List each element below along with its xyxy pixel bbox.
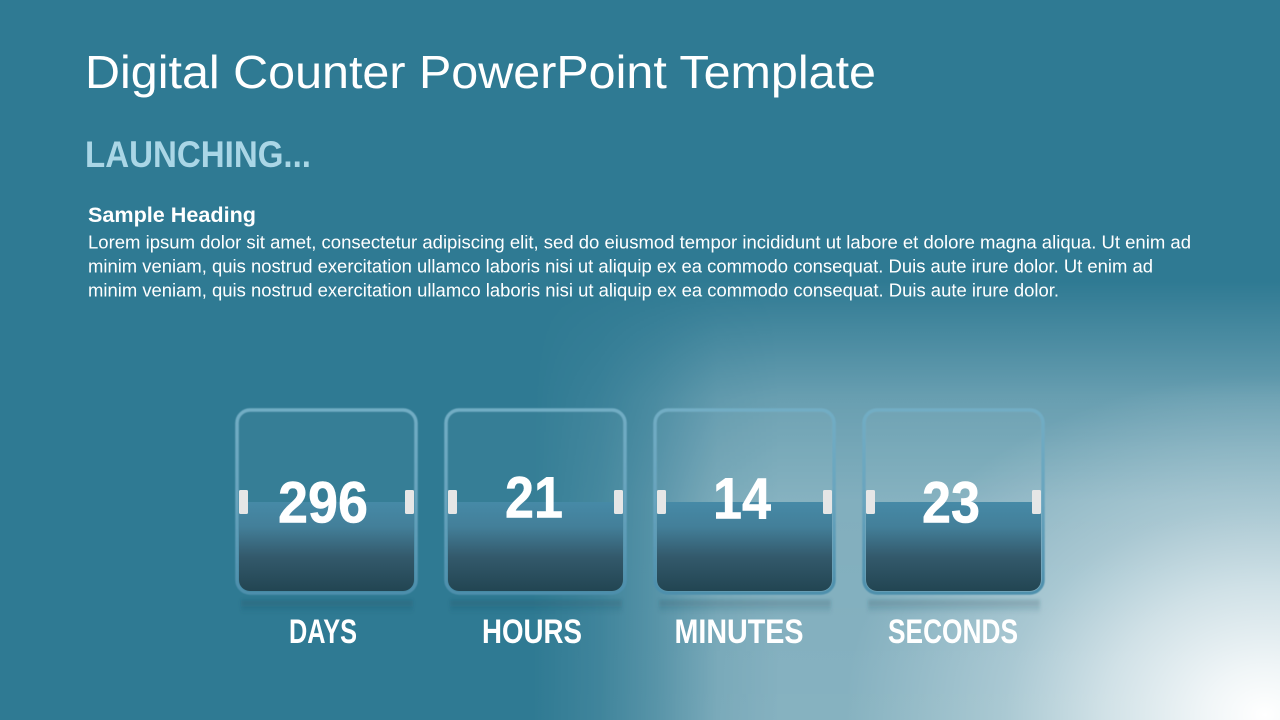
lower flip panel [448,502,623,591]
card shadow [450,598,622,614]
body text: minim veniam, quis nostrud exercitation ullamco laboris nisi ut aliquip ex ea commodo consequat. Duis aute irure dolor. Ut enim ad [88,256,1153,276]
text block [88,204,1191,300]
title: Digital Counter PowerPoint Template [85,46,876,98]
lower flip panel [866,502,1041,591]
card frame [655,410,834,593]
card shadow [241,598,413,614]
subtitle: launching: LAUNCHING... [85,133,311,175]
number: 296 [278,470,368,536]
card shadow [659,598,831,614]
label: SECONDS [888,613,1018,651]
card frame [864,410,1043,593]
left hinge [239,490,248,514]
sample heading: Sample Heading [88,204,256,227]
right hinge [405,490,414,514]
card frame [446,410,625,593]
right hinge [614,490,623,514]
card frame [237,410,416,593]
number: 14 [713,466,771,532]
body text [88,232,1191,300]
right hinge [1032,490,1041,514]
body text: minim veniam, quis nostrud exercitation ullamco laboris nisi ut aliquip ex ea commodo consequat. Duis aute irure dolor. [88,280,1059,300]
body text: Lorem ipsum dolor sit amet, consectetur adipiscing elit, sed do eiusmod tempor incididunt ut labore et dolore magna aliqua. Ut enim ad [88,232,1191,252]
left hinge [866,490,875,514]
label: HOURS [482,613,582,651]
counter: days [237,410,416,651]
lower flip panel [657,502,832,591]
card shadow [868,598,1040,614]
label: MINUTES [674,613,804,651]
right hinge [823,490,832,514]
left hinge [657,490,666,514]
label: DAYS [289,613,357,651]
lower flip panel [239,502,414,591]
counter: seconds [864,410,1043,651]
left hinge [448,490,457,514]
number: 21 [505,466,563,530]
background [568,300,1280,720]
counter: minutes [655,410,834,651]
counter: hours [446,410,625,651]
number: 23 [922,470,980,536]
